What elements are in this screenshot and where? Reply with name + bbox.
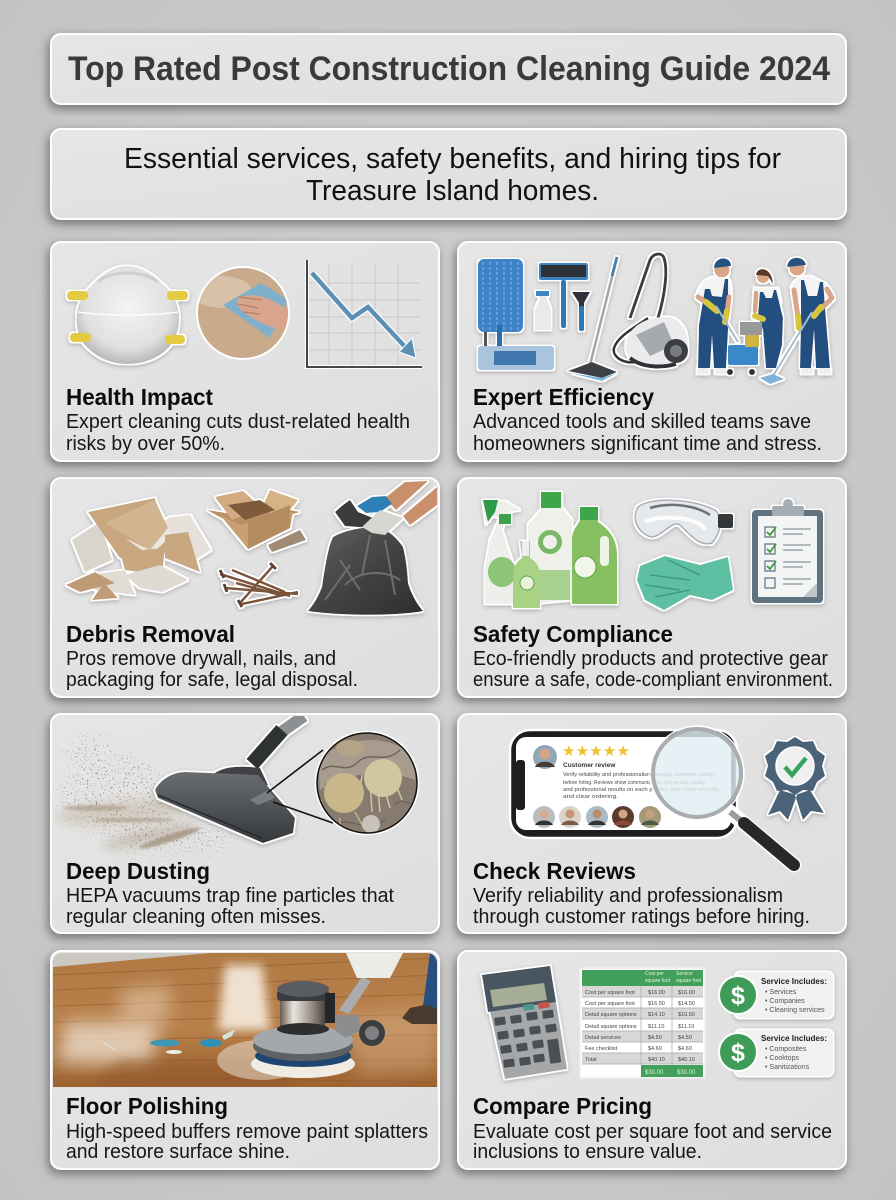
worker left <box>697 258 731 374</box>
pricing table: $16.00 <box>648 990 665 996</box>
service includes card 2: $ <box>731 1039 745 1067</box>
pricing table: Cost per square foot <box>585 1001 635 1007</box>
heading and text: through customer ratings before hiring. <box>473 906 810 928</box>
magnifier connector lines <box>267 750 333 823</box>
service includes card 1: • Services <box>765 989 797 996</box>
icon: rubber gloves <box>637 556 733 610</box>
heading and text: Advanced tools and skilled teams save <box>473 411 811 433</box>
service includes card 2: • Sanitizations <box>765 1064 810 1071</box>
panel: expert efficiency <box>458 242 846 461</box>
service includes card 2 <box>719 1030 833 1076</box>
heading and text: HEPA vacuums trap fine particles that <box>66 885 394 907</box>
panel: deep dusting <box>51 714 439 933</box>
heading and text <box>473 1093 832 1163</box>
service includes card 1: Service Includes: <box>761 976 827 986</box>
heading and text: Compare Pricing <box>473 1093 652 1119</box>
review text: Customer review <box>563 762 616 769</box>
panel: health impact <box>51 242 439 461</box>
pricing table: $30.00 <box>645 1070 664 1076</box>
heading and text: homeowners significant time and stress. <box>473 433 822 455</box>
icon: dust mask <box>67 266 188 364</box>
subtitle: Treasure Island homes. <box>306 175 599 207</box>
pricing table: $4.60 <box>648 1046 662 1052</box>
heading and text: Floor Polishing <box>66 1093 228 1119</box>
pricing table: $4.50 <box>648 1035 662 1041</box>
icon: phone with customer review <box>510 730 737 838</box>
service includes card 1: • Cleaning services <box>765 1007 825 1014</box>
heading and text: Check Reviews <box>473 858 636 884</box>
icon: verified badge <box>765 737 825 820</box>
pricing table: Service <box>676 971 693 977</box>
heading and text: Eco-friendly products and protective gear <box>473 648 828 670</box>
subtitle: Essential services, safety benefits, and hiring tips for <box>124 143 781 175</box>
star rating: ★★★★★ <box>562 743 630 760</box>
panel: floor polishing <box>51 951 439 1169</box>
icon: flat mop <box>478 259 554 370</box>
subtitle <box>51 129 846 219</box>
pricing table: $14.10 <box>648 1012 665 1018</box>
review text: and professional results on each project, plus clean and tidy <box>563 787 719 793</box>
heading and text: inclusions to ensure value. <box>473 1141 702 1163</box>
review text <box>563 762 719 800</box>
icon: drywall pile <box>66 498 211 600</box>
heading and text: Expert Efficiency <box>473 384 654 410</box>
floor buffer machine <box>217 953 403 1080</box>
pricing table: $40.10 <box>648 1057 665 1063</box>
pricing table <box>580 968 705 1078</box>
pricing table: Cost per <box>645 971 664 977</box>
icon: steam mop <box>568 257 617 381</box>
mop handles and cart <box>716 306 812 384</box>
pricing table: Total <box>585 1057 597 1063</box>
pricing table: square foot <box>676 978 702 984</box>
heading and text: regular cleaning often misses. <box>66 906 326 928</box>
panel: debris removal <box>51 478 439 697</box>
top avatar <box>533 745 557 769</box>
service includes card 2: Service Includes: <box>761 1033 827 1043</box>
heading and text: Deep Dusting <box>66 858 210 884</box>
pricing table: $4.60 <box>678 1046 692 1052</box>
heading and text <box>473 621 833 691</box>
pricing table: Detail square options <box>585 1024 637 1030</box>
heading and text: Safety Compliance <box>473 621 673 647</box>
panel: safety compliance <box>458 478 846 697</box>
heading and text: Evaluate cost per square foot and service <box>473 1121 832 1143</box>
pricing table: $30.00 <box>677 1070 696 1076</box>
heading and text: Debris Removal <box>66 621 235 647</box>
pricing table: $14.50 <box>678 1001 695 1007</box>
pricing table: square foot <box>645 978 671 984</box>
title <box>51 34 846 104</box>
icon: nails <box>220 563 298 607</box>
icon: safety goggles <box>635 500 733 544</box>
pricing table: $11.10 <box>648 1024 664 1030</box>
pricing table: $16.00 <box>678 990 695 996</box>
panel: check reviews <box>458 714 846 933</box>
review text: before hiring. Reviews show communication and service quality <box>563 780 705 786</box>
pricing table: Detail square options <box>585 1012 637 1018</box>
icon: dust mites magnified <box>312 732 418 835</box>
worker's leg <box>402 953 437 1024</box>
pricing table: $11.10 <box>678 1024 694 1030</box>
icon: hand wiping surface <box>192 267 290 359</box>
pricing table: $4.50 <box>678 1035 692 1041</box>
heading and text <box>473 858 810 928</box>
heading and text <box>66 621 358 691</box>
icon: canister vacuum <box>614 254 688 367</box>
paint splatters <box>103 1029 235 1054</box>
icon: cardboard box <box>207 490 306 552</box>
icon: eco cleaning bottles <box>483 492 617 608</box>
title: Top Rated Post Construction Cleaning Guide 2024 <box>68 50 830 88</box>
icon: squeegee and spray <box>535 263 590 331</box>
heading and text: and restore surface shine. <box>66 1141 290 1163</box>
heading and text <box>66 384 410 455</box>
heading and text: ensure a safe, code-compliant environment. <box>473 669 833 691</box>
heading and text <box>473 384 822 455</box>
heading and text: High-speed buffers remove paint splatters <box>66 1121 428 1143</box>
review text: Verify reliability and professionalism through customer ratings <box>563 772 715 778</box>
pricing table: $16.50 <box>648 1001 665 1007</box>
heading and text <box>66 1093 428 1163</box>
pricing table: $10.50 <box>678 1012 695 1018</box>
pricing table: Fee checklist <box>585 1046 618 1052</box>
review text: and clear ordering. <box>563 794 619 800</box>
service includes card 1: • Companies <box>765 998 805 1005</box>
service includes card 1 <box>719 972 833 1018</box>
heading and text: risks by over 50%. <box>66 433 225 455</box>
service includes card 2: • Cooktops <box>765 1055 799 1062</box>
panel: compare pricing <box>458 951 846 1169</box>
pricing table: Cost per square foot <box>585 990 635 996</box>
icon: vacuum floor head <box>155 716 304 843</box>
chart: declining health risk <box>307 260 422 367</box>
icon: magnifying glass <box>650 726 794 865</box>
icon: calculator <box>482 966 567 1079</box>
photo: floor buffer on wood floor <box>53 953 437 1087</box>
pricing table: Detail services <box>585 1035 621 1041</box>
icon: checklist clipboard <box>752 499 823 603</box>
dust cloud <box>54 736 235 854</box>
worker right <box>787 258 832 374</box>
icon: garbage bag with gloved hands <box>308 481 437 615</box>
service includes card 1: $ <box>731 982 745 1010</box>
service includes card 2: • Composites <box>765 1046 807 1053</box>
icon: cleaning team <box>697 258 832 384</box>
worker middle <box>754 269 783 368</box>
reviewer avatars <box>533 806 661 828</box>
heading and text: Verify reliability and professionalism <box>473 885 783 907</box>
heading and text: Health Impact <box>66 384 213 410</box>
heading and text <box>66 858 394 928</box>
pricing table: $40.10 <box>678 1057 695 1063</box>
heading and text: Pros remove drywall, nails, and <box>66 648 336 670</box>
heading and text: packaging for safe, legal disposal. <box>66 669 358 691</box>
heading and text: Expert cleaning cuts dust-related health <box>66 411 410 433</box>
